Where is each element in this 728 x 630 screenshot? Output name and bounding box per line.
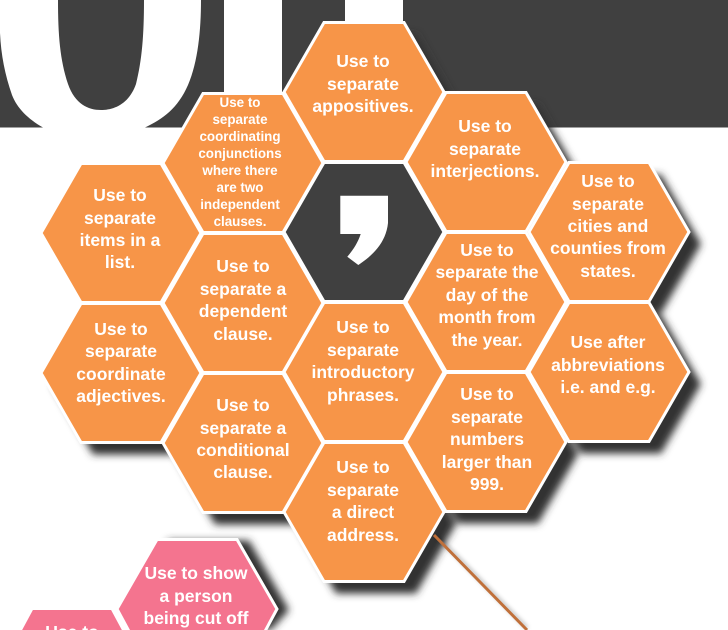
hexagon: conditional clause: conditional — [196, 440, 290, 460]
hexagon: coordinating conjunctions: are two — [217, 180, 263, 195]
hexagon: after abbreviations — [529, 302, 689, 442]
pink hexagon: person being cut off — [117, 540, 277, 630]
hexagon: day of the month from the year: month from — [438, 307, 536, 327]
hexagon: coordinating conjunctions: clauses. — [214, 214, 266, 229]
hexagon: dependent clause: separate a — [200, 279, 287, 299]
hexagon: cities and counties from states: Use to — [581, 171, 635, 191]
hexagon: numbers larger than 999: larger than — [442, 452, 532, 472]
leader line — [434, 535, 527, 630]
hexagon: coordinating conjunctions: where there — [201, 163, 278, 178]
hexagon: items in a list: items in a — [80, 230, 161, 250]
hexagon: conditional clause: separate a — [200, 418, 287, 438]
hexagon: coordinate adjectives: adjectives. — [76, 386, 166, 406]
pink hexagon: partly visible at the bottom edge — [20, 608, 124, 630]
hexagon: numbers larger than 999: separate — [451, 407, 523, 427]
hexagon: coordinate adjectives: Use to — [94, 319, 148, 339]
hexagon: separate interjections: Use to — [458, 116, 512, 136]
hexagon: cities and counties from states: counties from — [550, 238, 666, 258]
hexagon: after abbreviations: Use after — [571, 332, 646, 352]
hexagon: items in a list: separate — [84, 208, 156, 228]
hexagon: coordinating conjunctions: conjunctions — [198, 146, 282, 161]
hexagon: dependent clause: dependent — [199, 301, 287, 321]
hexagon: conditional clause: clause. — [213, 462, 273, 482]
hexagon: cities and counties from states: states. — [580, 261, 636, 281]
hexagon: after abbreviations: abbreviations — [551, 355, 665, 375]
hexagon: separate appositives: appositives. — [312, 96, 414, 116]
hexagon: direct address: Use to — [336, 457, 390, 477]
hexagon: after abbreviations: i.e. and e.g. — [560, 377, 656, 397]
pink hexagon: person being cut off: a person — [160, 586, 232, 606]
hexagon: coordinating conjunctions: coordinating — [199, 129, 281, 144]
hexagon: separate appositives: Use to — [336, 51, 390, 71]
hexagon: coordinate adjectives: separate — [85, 341, 157, 361]
hexagon: introductory phrases: introductory — [311, 362, 415, 382]
header band with oversized white title letters — [0, 0, 728, 128]
hexagon: items in a list: Use to — [93, 185, 147, 205]
hexagon: separate interjections: interjections. — [431, 161, 539, 181]
hexagon: separate appositives — [284, 22, 444, 162]
hexagon: day of the month from the year: the year. — [451, 330, 523, 350]
hexagon: day of the month from the year — [406, 232, 566, 372]
hexagon: day of the month from the year: day of the — [446, 285, 529, 305]
hexagon: coordinating conjunctions: Use to — [220, 95, 260, 110]
hexagon: dependent clause — [163, 234, 323, 372]
hexagon: numbers larger than 999: numbers — [450, 429, 524, 449]
hexagon: separate appositives: separate — [327, 74, 399, 94]
hexagon: introductory phrases: Use to — [336, 317, 390, 337]
hexagon: dependent clause: Use to — [216, 256, 270, 276]
hexagon: coordinate adjectives: coordinate — [76, 364, 166, 384]
hexagon: introductory phrases — [284, 302, 444, 442]
hexagon: coordinating conjunctions: independent — [200, 197, 280, 212]
centre hexagon with comma icon — [284, 162, 444, 302]
hexagon: numbers larger than 999: Use to — [460, 384, 514, 404]
pink hexagon: person being cut off: Use to show — [144, 563, 248, 583]
hexagon: direct address — [284, 442, 444, 582]
hexagon: coordinating conjunctions: separate — [212, 112, 268, 127]
hexagon: day of the month from the year: separate the — [435, 262, 539, 282]
hexagon: coordinating conjunctions — [163, 94, 323, 232]
hexagon: separate interjections — [406, 92, 566, 232]
hexagon: cities and counties from states — [529, 162, 689, 302]
hexagon: dependent clause: clause. — [213, 324, 273, 344]
hexagon: cities and counties from states: separate — [572, 194, 644, 214]
pink hexagon: person being cut off: being cut off — [144, 608, 249, 628]
hexagon: introductory phrases: separate — [327, 340, 399, 360]
hexagon: direct address: address. — [327, 525, 399, 545]
hexagon: numbers larger than 999 — [406, 372, 566, 512]
hexagon: items in a list — [41, 164, 201, 302]
hexagon: numbers larger than 999: 999. — [470, 474, 504, 494]
hexagon: conditional clause: Use to — [216, 395, 270, 415]
hexagon: cities and counties from states: cities and — [568, 216, 648, 236]
hexagon: coordinate adjectives — [41, 304, 201, 442]
hexagon: day of the month from the year: Use to — [460, 240, 514, 260]
hexagon: separate interjections: separate — [449, 139, 521, 159]
hexagon: introductory phrases: phrases. — [327, 385, 399, 405]
hexagon: items in a list: list. — [105, 252, 135, 272]
hexagon: conditional clause — [163, 374, 323, 512]
hexagon: direct address: separate — [327, 480, 399, 500]
hexagon: direct address: a direct — [332, 502, 394, 522]
